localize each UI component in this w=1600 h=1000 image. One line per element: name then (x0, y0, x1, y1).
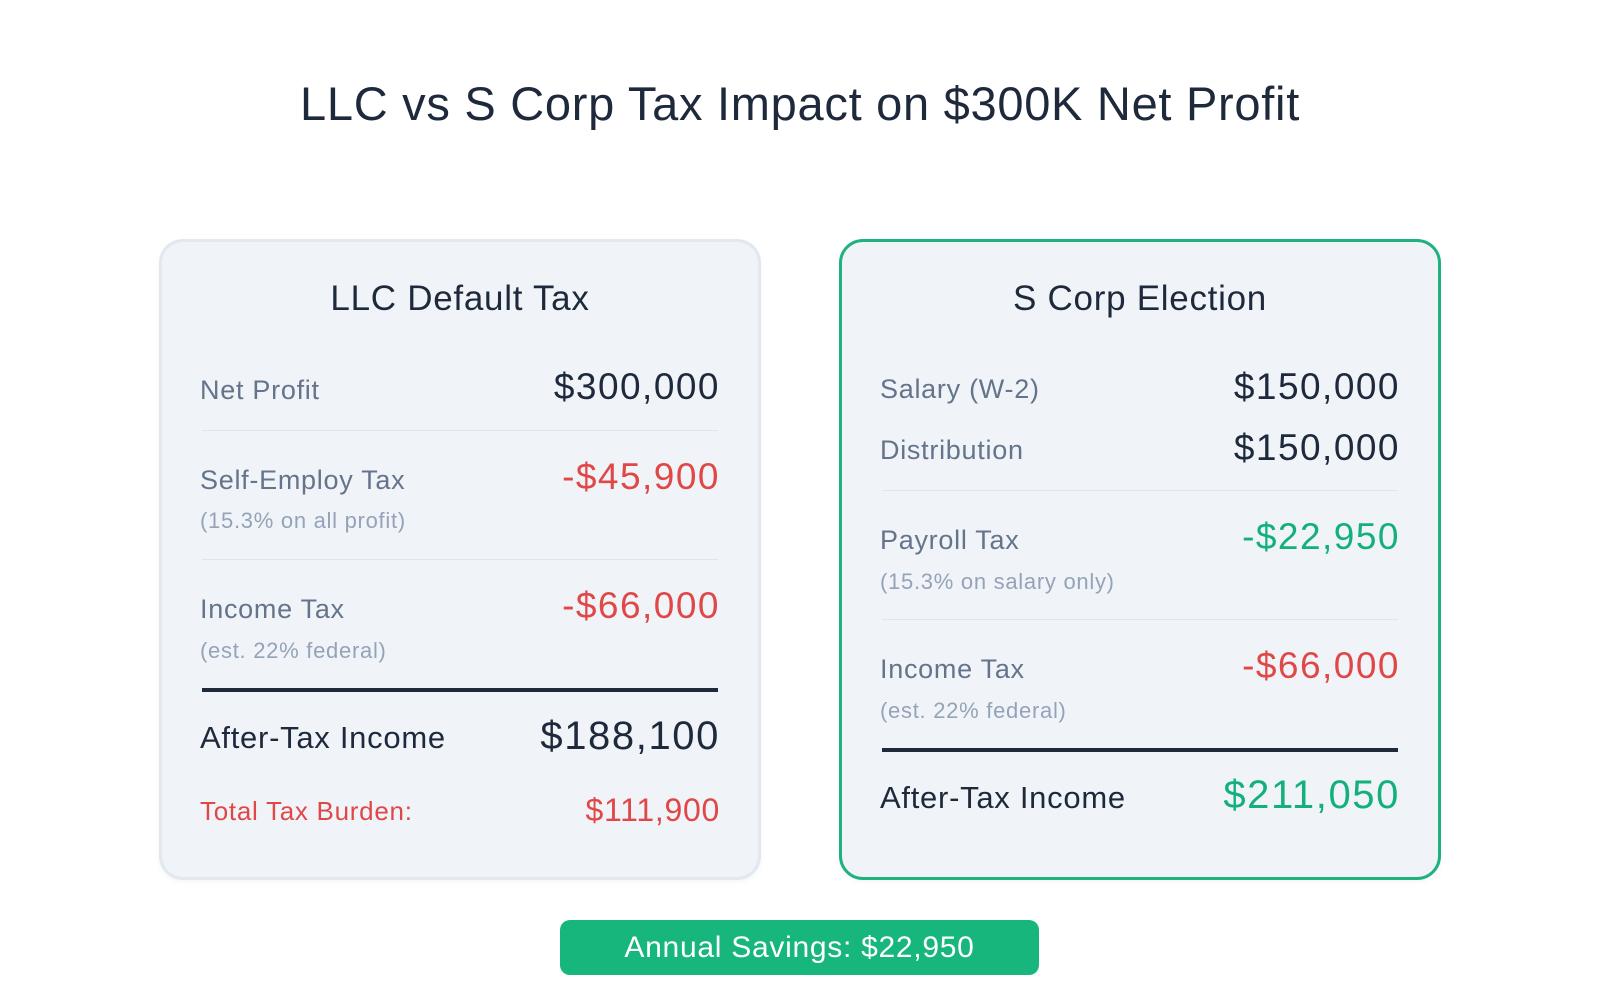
panel: LLC default tax: (est. 22% federal) (200, 638, 387, 663)
panel: LLC default tax: (15.3% on all profit) (200, 508, 406, 533)
row: salary: Salary (W-2) (880, 374, 1040, 404)
panel: LLC default tax (159, 239, 761, 880)
row: payroll tax: Payroll Tax (880, 525, 1019, 555)
panel: LLC default tax: $300,000 (554, 366, 720, 407)
row: net profit: Net Profit (200, 375, 320, 405)
row: after-tax income: After-Tax Income (880, 780, 1126, 815)
row: after-tax income: After-Tax Income (200, 720, 446, 755)
panel: S corp election: $150,000 (1234, 427, 1400, 468)
panel: S corp election: $150,000 (1234, 366, 1400, 407)
row: distribution: Distribution (880, 435, 1024, 465)
panel: LLC default tax: -$45,900 (562, 456, 720, 497)
panel heading: S Corp Election (1013, 279, 1267, 318)
panel: S corp election: $211,050 (1223, 773, 1400, 817)
panel: LLC default tax: -$66,000 (562, 585, 720, 626)
title: LLC vs S Corp Tax Impact on $300K Net Profit (300, 77, 1300, 130)
panel heading: LLC Default Tax (330, 279, 590, 318)
row: income tax: Income Tax (200, 594, 345, 624)
panel: S corp election: -$66,000 (1242, 645, 1400, 686)
panel: LLC default tax: $188,100 (540, 714, 720, 758)
callout: annual savings (560, 920, 1039, 975)
row: total tax burden: Total Tax Burden: (200, 796, 413, 826)
callout: annual savings: Annual Savings: $22,950 (624, 931, 975, 964)
row: income tax: Income Tax (880, 654, 1025, 684)
panel: LLC default tax: $111,900 (586, 792, 720, 828)
panel: S corp election (839, 239, 1441, 880)
row: self-employ tax: Self-Employ Tax (200, 465, 405, 495)
panel: S corp election: (est. 22% federal) (880, 698, 1067, 723)
panel: S corp election: (15.3% on salary only) (880, 569, 1115, 594)
panel: S corp election: -$22,950 (1242, 516, 1400, 557)
